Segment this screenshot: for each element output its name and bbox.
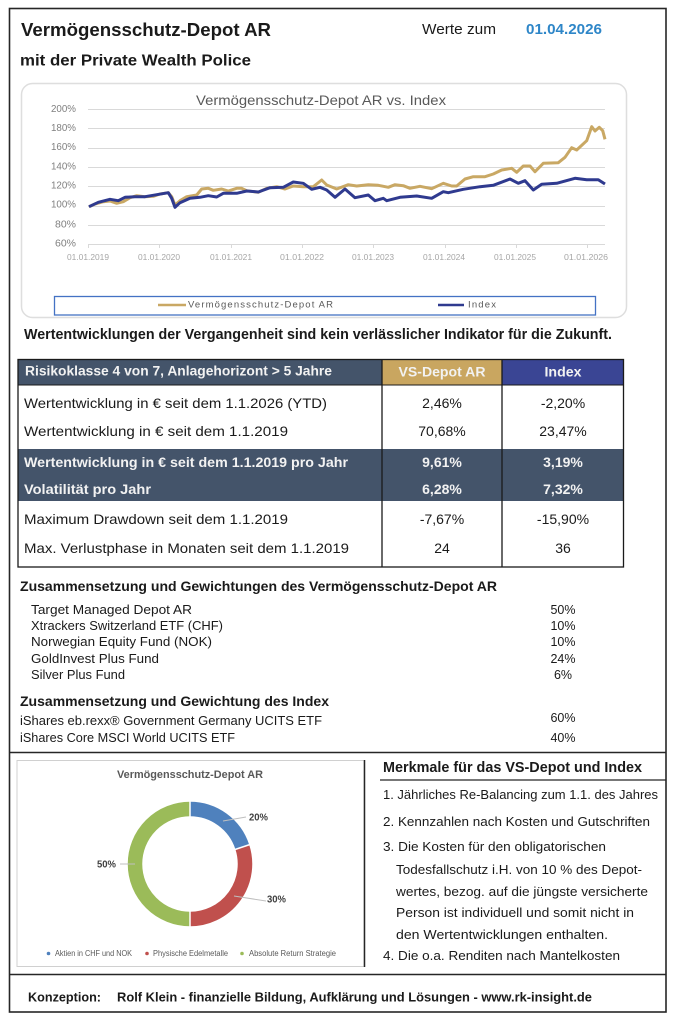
gridlines and axis labels: 01.01.2026 bbox=[564, 252, 608, 262]
gridlines and axis labels: 100% bbox=[51, 200, 76, 210]
panel: features list: wertes, bezog. auf die jüngste versicherte bbox=[395, 885, 648, 899]
panel: features list: Person ist individuell und somit nicht in bbox=[396, 906, 634, 920]
panel: features list: den Wertentwicklungen enthalten. bbox=[396, 928, 608, 942]
table rows: 36 bbox=[555, 540, 571, 556]
donut legend bbox=[47, 949, 337, 958]
gridlines and axis labels: 01.01.2021 bbox=[210, 252, 252, 262]
table rows: Wertentwicklung in € seit dem 1.1.2019 pro Jahr bbox=[24, 454, 349, 470]
table rows: Maximum Drawdown seit dem 1.1.2019 bbox=[24, 511, 288, 527]
gridlines and axis labels: 200% bbox=[51, 104, 76, 115]
index heading: Zusammensetzung und Gewichtung des Index bbox=[20, 693, 329, 709]
table rows: 23,47% bbox=[539, 423, 587, 439]
gridlines and axis labels: 80% bbox=[55, 220, 76, 230]
chart legend: Vermögensschutz-Depot AR bbox=[188, 300, 333, 310]
table rows: -7,67% bbox=[420, 511, 464, 527]
table header row: VS-Depot AR bbox=[398, 364, 486, 380]
donut legend: Physische Edelmetalle bbox=[153, 949, 229, 958]
donut legend: Aktien in CHF und NOK bbox=[55, 949, 133, 958]
date value: 01.04.2026 bbox=[526, 22, 602, 38]
table header row: Risikoklasse 4 von 7, Anlagehorizont > 5 Jahre bbox=[25, 364, 332, 378]
table header row bbox=[18, 360, 623, 385]
donut leaders and labels: 20% bbox=[249, 812, 268, 824]
panel: composition of the index: 40% bbox=[550, 731, 576, 745]
panel: composition of the index: iShares eb.rexx® Government Germany UCITS ETF bbox=[20, 714, 322, 728]
table rows: 2,46% bbox=[422, 395, 462, 411]
panel: performance table bbox=[18, 360, 624, 567]
panel: features list: 4. Die o.a. Renditen nach Mantelkosten bbox=[383, 949, 620, 963]
features heading: Merkmale für das VS-Depot und Index bbox=[383, 760, 642, 776]
gridlines and axis labels bbox=[51, 104, 608, 262]
donut leaders and labels bbox=[97, 812, 286, 906]
chart legend bbox=[54, 296, 596, 315]
gridlines and axis labels: 120% bbox=[51, 180, 76, 192]
table rows bbox=[24, 395, 589, 556]
panel: composition of the depot: 10% bbox=[550, 635, 576, 649]
date label: Werte zum bbox=[422, 22, 496, 38]
footer: Konzeption: bbox=[28, 990, 101, 1004]
panel: donut chart bbox=[17, 760, 364, 967]
gridlines and axis labels: 01.01.2024 bbox=[423, 252, 465, 262]
chart title: Vermögensschutz-Depot AR vs. Index bbox=[196, 92, 446, 108]
subtitle: mit der Private Wealth Police bbox=[20, 52, 251, 70]
highlighted rows background bbox=[18, 449, 623, 501]
table rows: 6,28% bbox=[422, 481, 462, 497]
heading block bbox=[20, 20, 602, 70]
table rows: Wertentwicklung in € seit dem 1.1.2019 bbox=[24, 423, 288, 439]
donut title: Vermögensschutz-Depot AR bbox=[117, 769, 263, 781]
panel: composition of the index: 60% bbox=[550, 711, 576, 725]
disclaimer: Wertentwicklungen der Vergangenheit sind kein verlässlicher Indikator für die Zukunft. bbox=[24, 327, 612, 343]
panel: composition of the depot: Target Managed Depot AR bbox=[31, 603, 192, 617]
gridlines and axis labels: 140% bbox=[51, 162, 76, 172]
panel: line chart bbox=[22, 84, 626, 318]
panel: features list: Todesfallschutz i.H. von 10 % des Depot- bbox=[396, 863, 642, 877]
panel: features list: 1. Jährliches Re-Balancing zum 1.1. des Jahres bbox=[383, 788, 658, 802]
panel: composition of the depot: Norwegian Equity Fund (NOK) bbox=[31, 635, 212, 649]
gridlines and axis labels: 60% bbox=[55, 238, 76, 250]
panel: composition of the depot bbox=[20, 578, 576, 682]
panel: composition of the depot: 24% bbox=[550, 652, 576, 666]
title: Vermögensschutz-Depot AR bbox=[21, 20, 271, 40]
series: Index bbox=[89, 178, 605, 207]
table header row: Index bbox=[544, 364, 582, 380]
table rows: Max. Verlustphase in Monaten seit dem 1.1.2019 bbox=[24, 540, 349, 556]
donut leaders and labels: 30% bbox=[267, 894, 286, 906]
table rows: Wertentwicklung in € seit dem 1.1.2026 (YTD) bbox=[24, 395, 327, 411]
gridlines and axis labels: 180% bbox=[51, 123, 76, 134]
table rows: 9,61% bbox=[422, 454, 462, 470]
panel: composition of the depot: 50% bbox=[550, 603, 576, 617]
panel: features list: 3. Die Kosten für den obligatorischen bbox=[383, 840, 606, 854]
table rows: 70,68% bbox=[418, 423, 466, 439]
table rows: 3,19% bbox=[543, 454, 583, 470]
gridlines and axis labels: 01.01.2022 bbox=[280, 252, 324, 262]
footer: Rolf Klein - finanzielle Bildung, Aufklärung und Lösungen - www.rk-insight.de bbox=[117, 990, 592, 1004]
gridlines and axis labels: 01.01.2023 bbox=[352, 252, 394, 262]
donut legend: Absolute Return Strategie bbox=[249, 949, 337, 958]
gridlines and axis labels: 01.01.2025 bbox=[494, 252, 536, 262]
panel: composition of the depot: 10% bbox=[550, 619, 576, 633]
donut ring bbox=[135, 801, 250, 927]
chart legend: Index bbox=[468, 300, 496, 310]
series: Vermögensschutz-Depot AR bbox=[89, 127, 605, 207]
donut leaders and labels: 50% bbox=[97, 860, 116, 870]
panel: composition of the index bbox=[20, 693, 576, 745]
panel: composition of the depot: 6% bbox=[554, 668, 572, 682]
panel: composition of the depot: GoldInvest Plus Fund bbox=[31, 652, 159, 666]
panel: composition of the depot: Silver Plus Fund bbox=[31, 668, 125, 682]
panel: features list: 2. Kennzahlen nach Kosten und Gutschriften bbox=[383, 815, 650, 829]
composition heading: Zusammensetzung und Gewichtungen des Vermögensschutz-Depot AR bbox=[20, 578, 497, 594]
table rows: -2,20% bbox=[541, 395, 585, 411]
table rows: 7,32% bbox=[543, 481, 583, 497]
gridlines and axis labels: 160% bbox=[51, 142, 76, 153]
gridlines and axis labels: 01.01.2020 bbox=[138, 252, 180, 262]
panel: composition of the index: iShares Core MSCI World UCITS ETF bbox=[20, 731, 235, 745]
panel: composition of the depot: Xtrackers Switzerland ETF (CHF) bbox=[31, 619, 223, 633]
table rows: -15,90% bbox=[537, 511, 589, 527]
table rows: Volatilität pro Jahr bbox=[24, 481, 152, 497]
gridlines and axis labels: 01.01.2019 bbox=[67, 252, 109, 262]
table rows: 24 bbox=[434, 540, 450, 556]
panel: features list bbox=[380, 760, 666, 963]
